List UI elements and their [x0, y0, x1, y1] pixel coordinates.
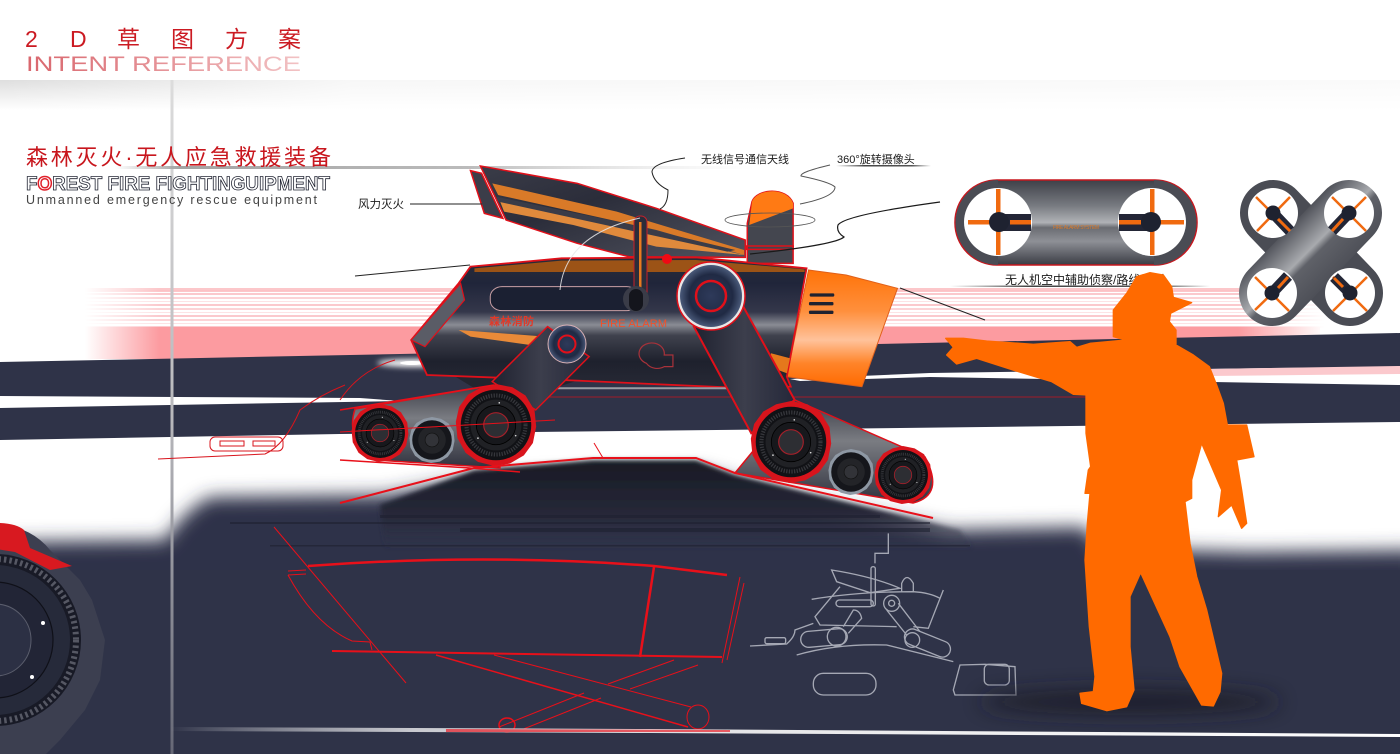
bolts [41, 621, 45, 625]
belly shadow [453, 375, 577, 388]
body label cn: 森林消防 [489, 314, 534, 328]
orange nose [787, 270, 898, 387]
frame lines [115, 80, 755, 754]
drone top view single [955, 180, 1197, 265]
label: antenna [652, 152, 789, 209]
ground and mound [0, 460, 1400, 754]
rotor left [956, 180, 1032, 265]
ground highlight line [170, 727, 1400, 737]
rotor right [1118, 180, 1197, 265]
lower skirt line [554, 387, 727, 389]
right arm [694, 307, 795, 433]
label: camera: 360°旋转摄像头 [837, 152, 915, 166]
drone body label: FIRE ALARM SYSTEM [1053, 225, 1099, 231]
red marker dot [662, 254, 672, 264]
side slot [490, 287, 639, 311]
wheels [352, 384, 931, 504]
rotor top right [1324, 188, 1374, 238]
firefighter silhouette [946, 273, 1254, 711]
antenna [623, 216, 649, 312]
orange top strip [474, 260, 805, 272]
body shell [411, 257, 807, 387]
subtitle tagline: Unmanned emergency rescue equipment [26, 193, 318, 207]
vent slits [809, 293, 834, 314]
large wheel detail [0, 523, 105, 754]
subtitle block: 森林灭火·无人应急救援装备 [26, 145, 331, 170]
drone caption: 无人机空中辅助侦察/路线规划 [1005, 272, 1164, 287]
body label en: FIRE ALARM [600, 318, 667, 330]
launcher and body shapes in sketch coordinates [411, 166, 898, 433]
label: wind fire [358, 198, 482, 211]
orange streaks [459, 330, 546, 347]
person ground shadow [980, 689, 1280, 715]
subtitle block [26, 145, 331, 207]
label: camera [725, 152, 940, 254]
grey sketch: miniature concept [750, 533, 1016, 695]
camera turret [746, 191, 793, 263]
front window [411, 283, 465, 347]
left small red sketch [158, 360, 395, 459]
red sketch: lift platform [274, 527, 744, 732]
title english: INTENT REFERENCE [26, 53, 301, 76]
vehicle [340, 166, 933, 518]
title [25, 26, 301, 76]
lock icon [639, 343, 673, 368]
rotor bottom right [1325, 268, 1375, 318]
large joint [677, 262, 745, 330]
drone x view [1247, 188, 1375, 318]
wind launcher [470, 166, 745, 257]
subtitle english display: FOREST FIRE FIGHTINGUIPMENT [26, 174, 330, 195]
label: antenna: 无线信号通信天线 [701, 152, 789, 166]
left arm [492, 327, 589, 410]
small joint [548, 325, 586, 363]
left track [352, 385, 500, 468]
title: 2D草图方案 [25, 26, 301, 52]
body speed lines [355, 265, 985, 320]
scan arc [560, 218, 640, 290]
pink speed stripes [85, 288, 1325, 360]
rotor bottom left [1247, 268, 1297, 318]
red construction lines [340, 385, 933, 518]
label: wind fire: 风力灭火 [358, 198, 404, 211]
rotor top left [1248, 188, 1298, 238]
navy speed bands [0, 333, 1400, 440]
right track [735, 400, 933, 503]
